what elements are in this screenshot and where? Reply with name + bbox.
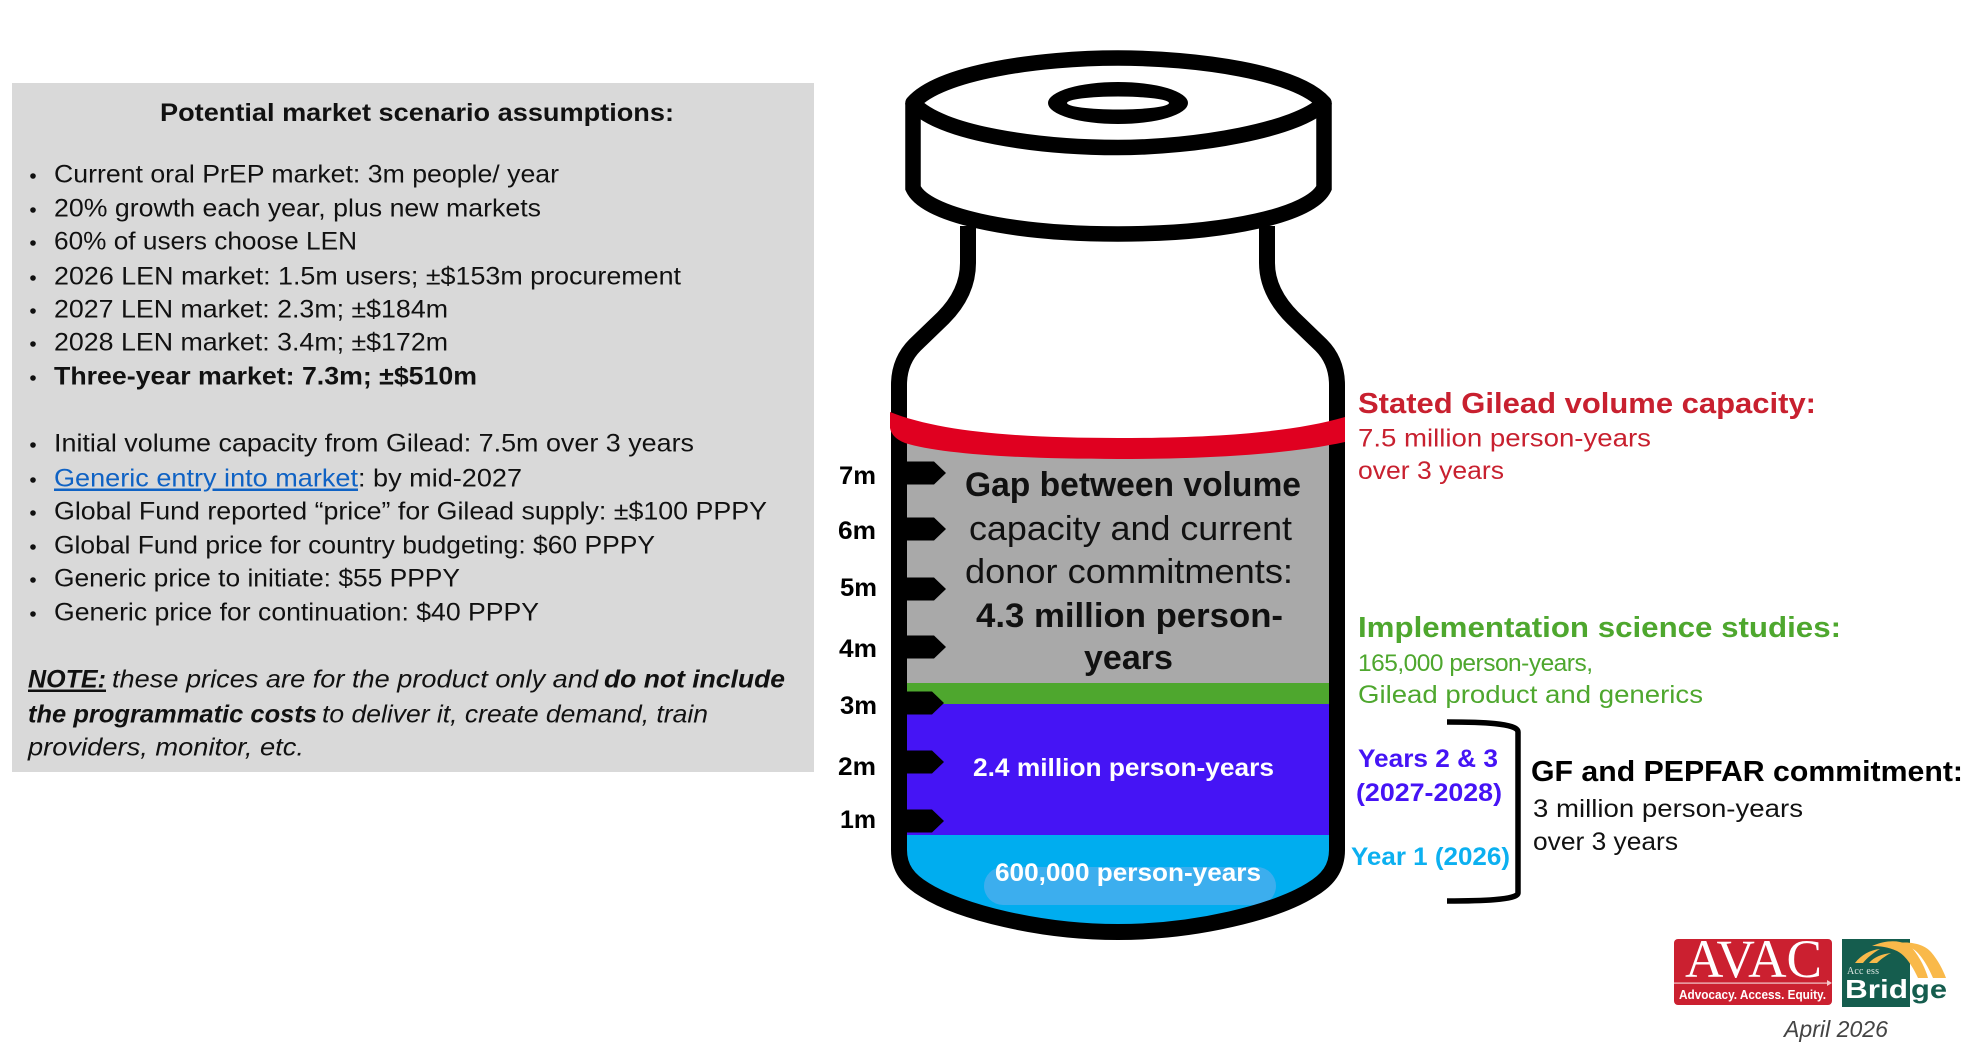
logo: Access Bridge: Brid [1845, 974, 1908, 1004]
vial body outline [899, 226, 1337, 932]
capacity level band [890, 412, 1345, 459]
scale ticks [900, 462, 946, 832]
bullet list: market assumptions [30, 160, 681, 390]
panel: market scenario assumptions [12, 83, 814, 772]
gap label: years [1084, 639, 1173, 677]
note on prices: these prices are for the product only and [112, 666, 599, 694]
callout: GF and PEPFAR commitment [1531, 756, 1963, 856]
note on prices: providers, monitor, etc. [27, 734, 304, 762]
label: years 2 and 3: Years 2 & 3 [1358, 745, 1498, 773]
scale labels [838, 462, 877, 834]
gap label [965, 466, 1301, 677]
scale labels: 1m [840, 806, 876, 834]
bullet list: supply and price assumptions: : by mid-2027 [358, 464, 522, 492]
bullet list: supply and price assumptions: Generic price for continuation: $40 PPPY [54, 598, 539, 626]
scale labels: 6m [838, 517, 876, 545]
vial cap [913, 58, 1324, 234]
bullet list: market assumptions: Three-year market: 7.3m; ±$510m [54, 362, 477, 390]
highlight pill behind year 1 label [984, 867, 1276, 905]
bullet list: supply and price assumptions: Generic entry into market [54, 464, 358, 492]
callout: implementation science: Implementation science studies: [1358, 612, 1841, 644]
gap label: Gap between volume [965, 466, 1301, 504]
note on prices: the programmatic costs [28, 700, 317, 728]
logo: AVAC: AVAC [1685, 929, 1822, 989]
bullet list: supply and price assumptions: Initial volume capacity from Gilead: 7.5m over 3 years [54, 430, 694, 458]
bullet list: market assumptions: 2026 LEN market: 1.5m users; ±$153m procurement [54, 262, 681, 290]
callout: Gilead capacity [1358, 388, 1816, 485]
callout: Gilead capacity: 7.5 million person-years [1358, 424, 1651, 452]
label: year 1: Year 1 (2026) [1351, 843, 1510, 871]
callout: implementation science: 165,000 person-years, [1358, 650, 1593, 677]
bullet list: market assumptions: 20% growth each year, plus new markets [54, 194, 541, 222]
bullet list: market assumptions: Current oral PrEP market: 3m people/ year [54, 160, 559, 188]
logo: Access Bridge [1842, 939, 1947, 1007]
scale labels: 5m [840, 574, 877, 602]
callout: GF and PEPFAR commitment: 3 million person-years [1533, 795, 1803, 823]
bullet list: market assumptions: 2027 LEN market: 2.3m; ±$184m [54, 296, 448, 324]
scale labels: 3m [840, 692, 877, 720]
scale labels: 2m [838, 753, 876, 781]
callout: GF and PEPFAR commitment: over 3 years [1533, 828, 1678, 856]
logo: AVAC: Advocacy. Access. Equity. [1679, 987, 1826, 1002]
callout: GF and PEPFAR commitment: GF and PEPFAR commitment: [1531, 756, 1963, 788]
bullet list: market assumptions: 60% of users choose LEN [54, 228, 357, 256]
gap label: donor commitments: [965, 553, 1293, 591]
note on prices [27, 666, 785, 762]
callout: Gilead capacity: Stated Gilead volume capacity: [1358, 388, 1816, 420]
gap label: capacity and current [969, 510, 1293, 548]
callout: Gilead capacity: over 3 years [1358, 457, 1504, 485]
scale labels: 7m [839, 462, 876, 490]
callout: implementation science [1358, 612, 1841, 709]
callout: implementation science: Gilead product and generics [1358, 681, 1703, 709]
bullet list: supply and price assumptions [30, 430, 767, 626]
scale labels: 4m [839, 635, 877, 663]
years 2 and 3 volume label: 2.4 million person-years [973, 754, 1274, 782]
label: years 2 and 3: (2027-2028) [1356, 779, 1502, 807]
bullet list: supply and price assumptions: Global Fund reported “price” for Gilead supply: ±$100 PPPY [54, 498, 767, 526]
bracket [1447, 722, 1518, 901]
date: April 2026 [1782, 1016, 1888, 1042]
vial chart [838, 58, 1350, 945]
vial fill levels [907, 444, 1329, 924]
gap label: 4.3 million person- [976, 597, 1283, 635]
logo: Access Bridge: Acc ess [1847, 966, 1879, 977]
label: years 2 and 3 [1356, 745, 1502, 807]
logo: Access Bridge: ge [1911, 974, 1947, 1004]
bullet list: market assumptions: 2028 LEN market: 3.4m; ±$172m [54, 328, 448, 356]
note on prices: NOTE: [28, 666, 106, 694]
bullet list: supply and price assumptions: Global Fund price for country budgeting: $60 PPPY [54, 532, 655, 560]
year 1 volume label: 600,000 person-years [995, 859, 1261, 887]
bullet list: supply and price assumptions: Generic price to initiate: $55 PPPY [54, 564, 460, 592]
logo: AVAC [1674, 929, 1832, 1005]
panel heading: Potential market scenario assumptions: [160, 99, 674, 127]
note on prices: to deliver it, create demand, train [322, 700, 708, 728]
note on prices: do not include [604, 666, 785, 694]
